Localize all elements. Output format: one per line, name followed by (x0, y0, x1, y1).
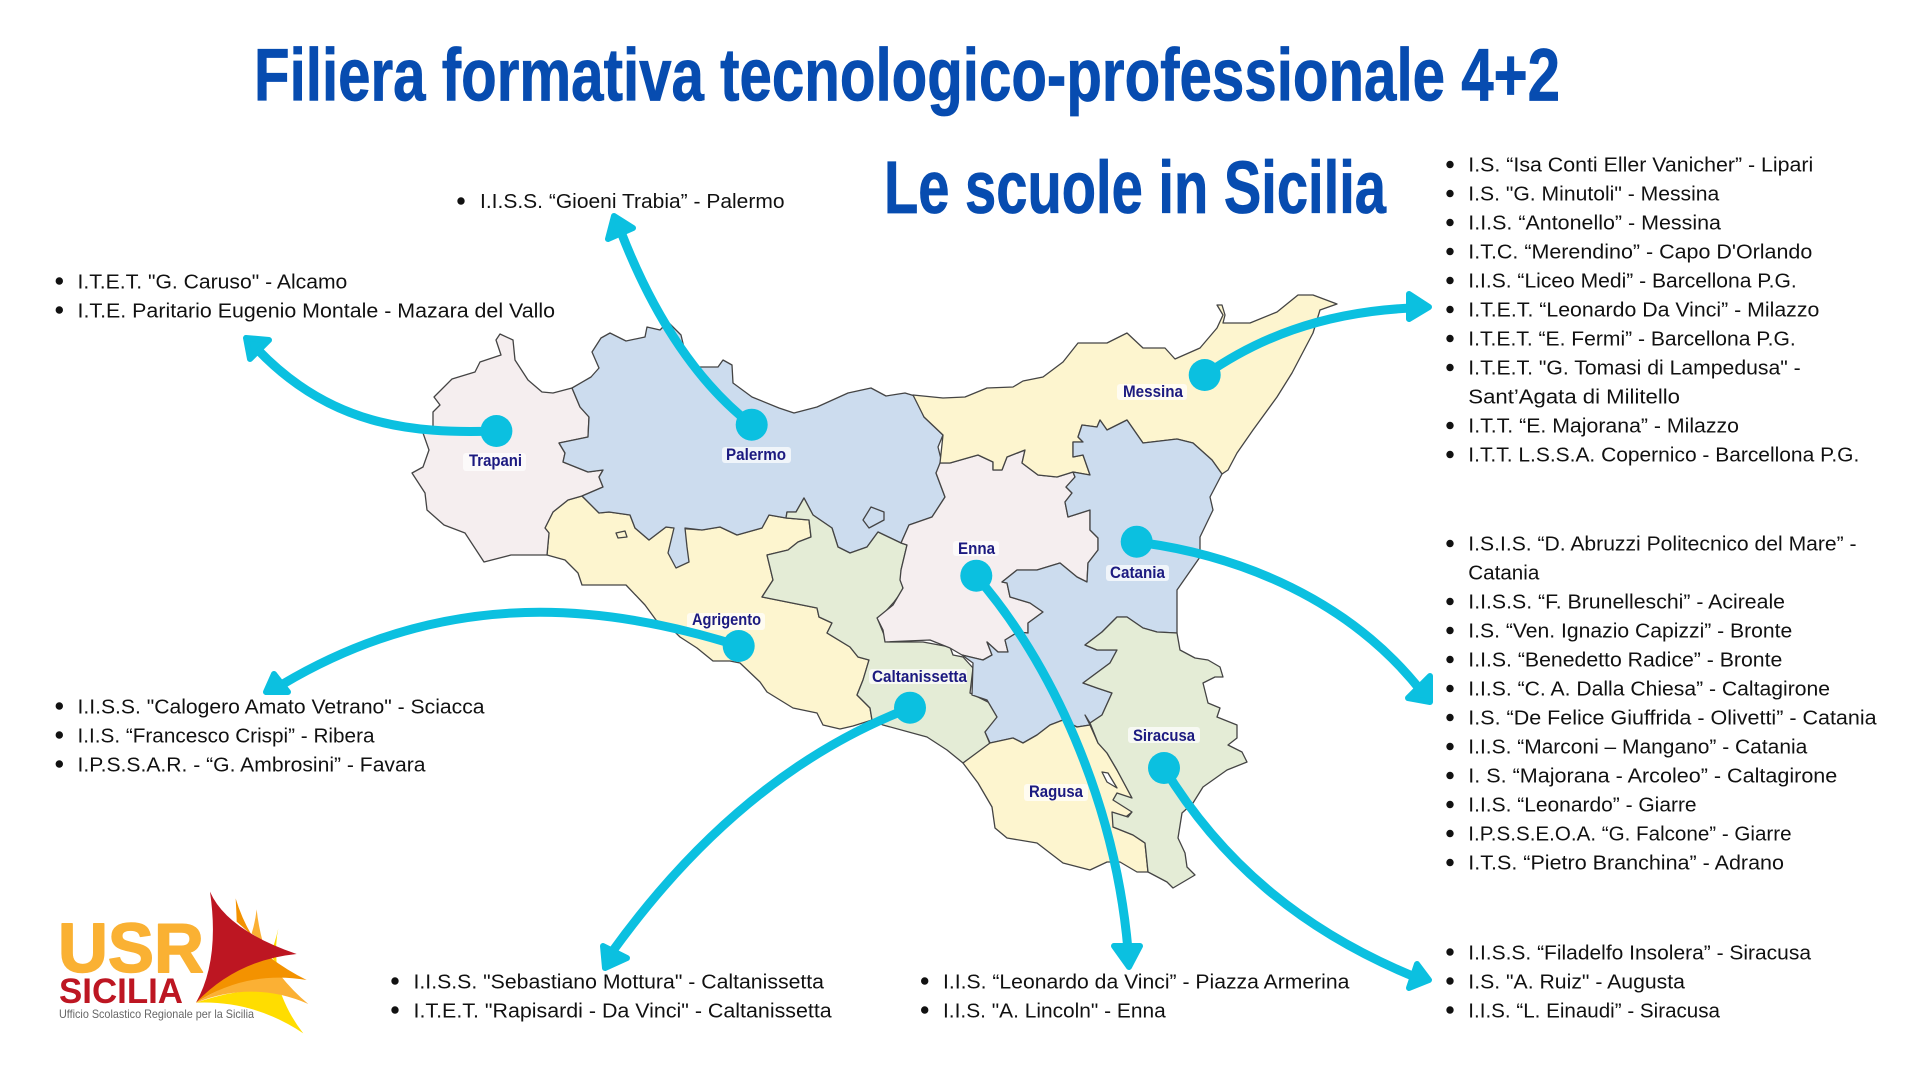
school list: Messina (1446, 154, 1859, 467)
school list: Catania: I.I.S. “Marconi – Mangano” - Catania (1468, 736, 1808, 759)
school list: Enna: I.I.S. “Leonardo da Vinci” - Piazza Armerina (943, 970, 1350, 993)
logo text: USR: USR (58, 909, 204, 987)
school list: Trapani: I.T.E. Paritario Eugenio Montale - Mazara del Vallo (78, 299, 555, 322)
school list: Catania (1446, 533, 1877, 875)
school list: Messina: I.I.S. “Antonello” - Messina (1468, 212, 1722, 235)
school list: Messina: I.T.E.T. "G. Tomasi di Lampedusa" - (1468, 357, 1801, 380)
label: Trapani: Trapani (469, 451, 522, 470)
arrow: Palermo to list (608, 216, 768, 441)
school list: Caltanissetta: I.T.E.T. "Rapisardi - Da Vinci" - Caltanissetta (414, 999, 832, 1022)
school list: Enna: I.I.S. "A. Lincoln" - Enna (943, 999, 1166, 1022)
school list: Messina: I.I.S. “Liceo Medi” - Barcellona P.G. (1468, 270, 1797, 293)
region: Agrigento (545, 496, 872, 729)
school list: Catania: I.S. “Ven. Ignazio Capizzi” - Bronte (1468, 620, 1792, 643)
school list: Messina: I.S. "G. Minutoli" - Messina (1468, 183, 1720, 206)
subtitle: Le scuole in Sicilia (884, 146, 1387, 229)
map of Sicily (412, 295, 1337, 888)
arrow: Agrigento to list (266, 612, 755, 692)
school list: Trapani: I.T.E.T. "G. Caruso" - Alcamo (78, 270, 347, 293)
school list: Siracusa: I.S. "A. Ruiz" - Augusta (1468, 970, 1686, 993)
school list: Agrigento: I.I.S. “Francesco Crispi” - Ribera (78, 724, 375, 747)
school list: Messina: I.T.E.T. “E. Fermi” - Barcellona P.G. (1468, 328, 1796, 351)
school list: Siracusa (1446, 941, 1812, 1022)
school list: Messina: I.T.T. L.S.S.A. Copernico - Barcellona P.G. (1468, 444, 1859, 467)
school list: Agrigento: I.I.S.S. "Calogero Amato Vetrano" - Sciacca (78, 695, 485, 718)
school list: Messina: I.S. “Isa Conti Eller Vanicher” - Lipari (1468, 154, 1813, 177)
school list: Messina: I.T.C. “Merendino” - Capo D'Orlando (1468, 241, 1812, 264)
title: Filiera formativa tecnologico-professionale 4+2 (254, 34, 1560, 116)
school list: Caltanissetta (391, 970, 832, 1022)
region: Ragusa (963, 720, 1148, 872)
region: Trapani (412, 334, 603, 562)
school list: Catania: I.I.S.S. “F. Brunelleschi” - Acireale (1468, 591, 1785, 614)
arrow: Catania to list (1121, 526, 1430, 702)
school list: Caltanissetta: I.I.S.S. "Sebastiano Mottura" - Caltanissetta (414, 970, 825, 993)
school list: Catania: I.I.S. “Benedetto Radice” - Bronte (1468, 649, 1782, 672)
school list: Enna (921, 970, 1350, 1022)
arrow: Messina to list (1189, 294, 1429, 391)
arrow: Enna to list (960, 560, 1140, 967)
school list: Catania: I.I.S. “C. A. Dalla Chiesa” - Caltagirone (1468, 678, 1830, 701)
school list: Catania: I.S.I.S. “D. Abruzzi Politecnico del Mare” - (1468, 533, 1857, 556)
label: Catania: Catania (1110, 563, 1165, 582)
logo text: SICILIA: SICILIA (59, 972, 183, 1011)
region: Enna (877, 450, 1098, 660)
label: Caltanissetta: Caltanissetta (872, 667, 967, 686)
region: Catania (962, 420, 1222, 743)
school list: Agrigento: I.P.S.S.A.R. - “G. Ambrosini” - Favara (78, 753, 426, 776)
region: Caltanissetta (762, 498, 998, 763)
school list: Catania: I.S. “De Felice Giuffrida - Olivetti” - Catania (1468, 707, 1877, 730)
region: Siracusa (1083, 617, 1247, 888)
region: Messina (913, 295, 1337, 477)
school list: Catania: I.I.S. “Leonardo” - Giarre (1468, 794, 1697, 817)
school list: Siracusa: I.I.S.S. “Filadelfo Insolera” - Siracusa (1468, 941, 1812, 964)
logo text: tagline: Ufficio Scolastico Regionale per la Sicilia (59, 1007, 254, 1021)
arrow: Siracusa to list (1148, 752, 1429, 988)
school list: Catania: I.T.S. “Pietro Branchina” - Adrano (1468, 852, 1784, 875)
label: Siracusa: Siracusa (1133, 726, 1195, 745)
logo: USR Sicilia (58, 892, 308, 1033)
arrow: Caltanissetta to list (603, 692, 926, 968)
label: Ragusa: Ragusa (1029, 782, 1083, 801)
school list: Messina: I.T.E.T. “Leonardo Da Vinci” - Milazzo (1468, 299, 1819, 322)
school list: Siracusa: I.I.S. “L. Einaudi” - Siracusa (1468, 999, 1721, 1022)
label: Messina: Messina (1123, 382, 1183, 401)
school list: Palermo: I.I.S.S. “Gioeni Trabia” - Palermo (480, 190, 784, 213)
arrow: Trapani to list (246, 338, 512, 447)
school list: Catania: Catania (1468, 562, 1540, 585)
region: Palermo (559, 322, 945, 568)
label: Agrigento: Agrigento (692, 610, 761, 629)
label: Enna: Enna (958, 539, 995, 558)
logo icon: sail (196, 892, 308, 1033)
school list: Agrigento (56, 695, 485, 776)
school list: Catania: I. S. “Majorana - Arcoleo” - Caltagirone (1468, 765, 1837, 788)
school list: Catania: I.P.S.S.E.O.A. “G. Falcone” - Giarre (1468, 823, 1792, 846)
school list: Trapani (56, 270, 555, 322)
school list: Messina: Sant’Agata di Militello (1468, 386, 1680, 409)
label: Palermo: Palermo (726, 445, 786, 464)
school list: Messina: I.T.T. “E. Majorana” - Milazzo (1468, 415, 1739, 438)
